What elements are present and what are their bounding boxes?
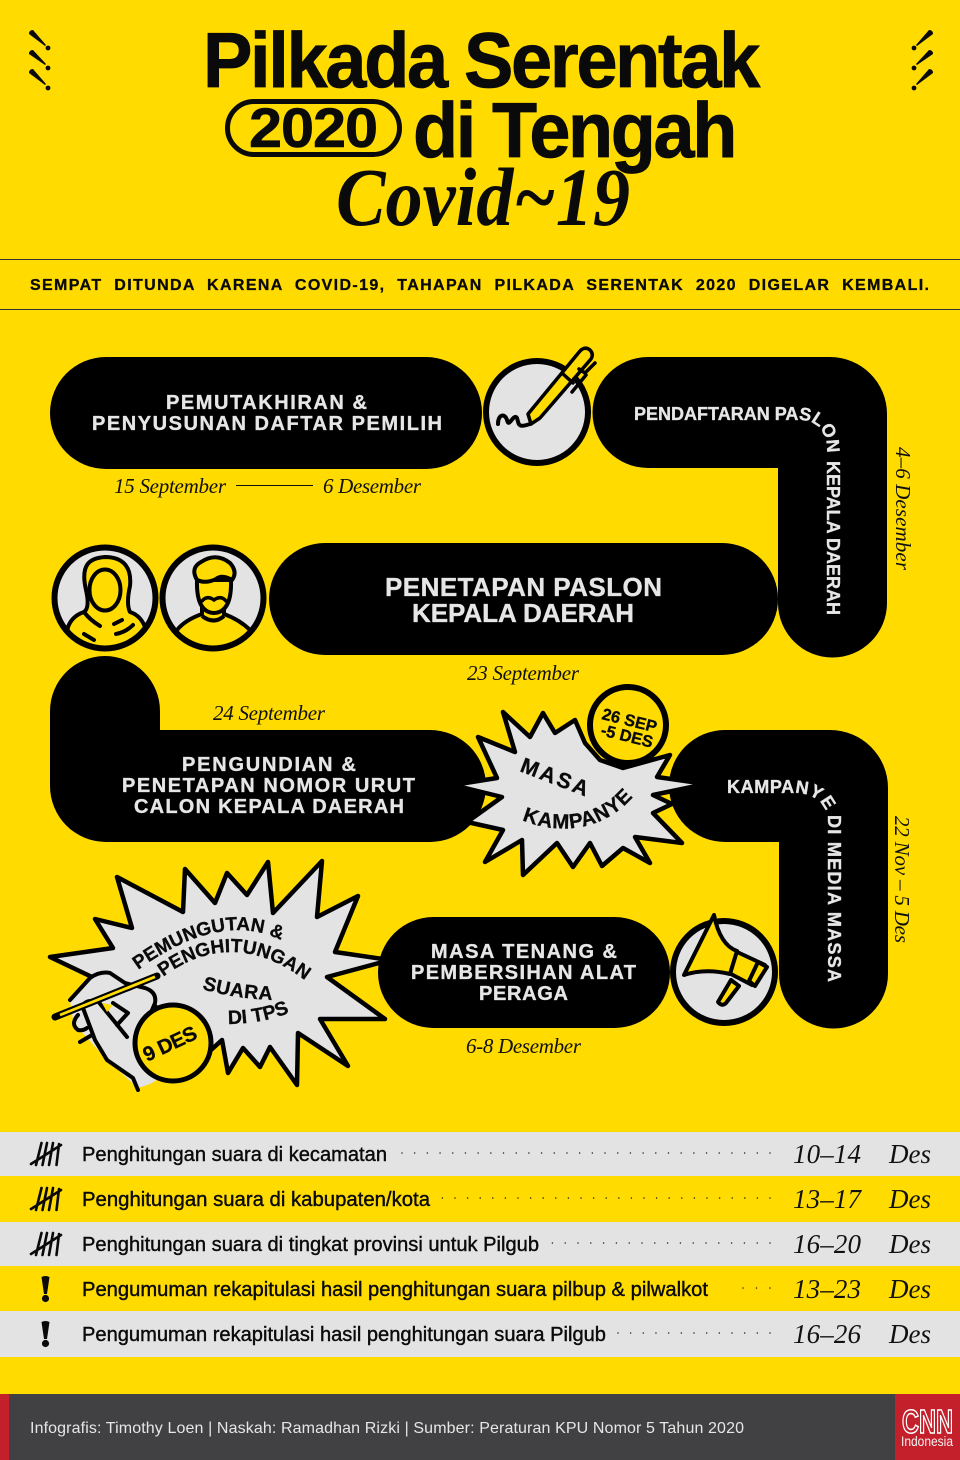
icon: hand with pencil — [55, 973, 200, 1090]
list row: pengumuman pilbup pilwalkot: 13–23 — [793, 1274, 861, 1304]
callout: pemungutan burst: SUARA — [203, 977, 272, 1000]
step: penetapan paslon kepala daerah — [269, 543, 778, 655]
list row: kecamatan: Penghitungan suara di kecamatan — [82, 1144, 387, 1166]
list row: provinsi — [0, 1222, 960, 1266]
list row: pengumuman pilbup pilwalkot: Des — [888, 1274, 931, 1304]
step: masa tenang: MASA TENANG & — [431, 941, 617, 963]
title — [203, 16, 761, 243]
badge: 9 Des — [135, 1005, 211, 1081]
step: pengundian nomor urut: PENGUNDIAN & — [182, 754, 356, 776]
step: kampanye di media massa: KAMPANYE — [728, 780, 836, 810]
step: pengundian nomor urut — [50, 656, 486, 842]
title: 2020 — [249, 96, 377, 159]
list row: pengumuman pilgub: 16–26 — [793, 1319, 862, 1349]
step: masa tenang — [378, 917, 670, 1028]
date: 15 September to 6 Desember: 6 Desember — [323, 474, 422, 498]
callout: pemungutan burst — [48, 858, 388, 1092]
step: pemutakhiran daftar pemilih — [50, 357, 482, 469]
title: Pilkada Serentak — [203, 16, 761, 104]
callout: masa kampanye burst — [464, 684, 694, 878]
list row: provinsi: Des — [888, 1229, 931, 1259]
date: 15 September to 6 Desember — [114, 474, 422, 498]
icon: left exclamation marks — [29, 30, 50, 90]
title: di Tengah — [413, 86, 735, 174]
step: penetapan paslon kepala daerah: KEPALA DAERAH — [412, 598, 634, 628]
badge: 9 Des: 9 DES — [139, 1022, 201, 1067]
callout: pemungutan burst: PEMUNGUTAN & — [132, 916, 282, 970]
step: masa tenang: PERAGA — [479, 983, 568, 1005]
badge: 26 Sep - 5 Des: -5 DES — [599, 721, 655, 752]
date: 23 September: 23 September — [467, 661, 580, 685]
list row: pengumuman pilgub — [0, 1311, 960, 1357]
callout: pemungutan burst: PENGHITUNGAN — [156, 938, 312, 980]
list row: kabupaten/kota: Des — [888, 1184, 931, 1214]
list row: kecamatan — [0, 1132, 960, 1176]
date: 4-6 Desember: 4–6 Desember — [891, 447, 915, 571]
date: 15 September to 6 Desember: 15 September — [114, 474, 227, 498]
callout: masa kampanye burst: KAMPANYE — [523, 788, 633, 829]
footer — [0, 1394, 960, 1460]
list row: kabupaten/kota — [31, 1184, 931, 1214]
step: kampanye di media massa: DI MEDIA MASSA — [824, 815, 844, 982]
footer: Infografis: Timothy Loen | Naskah: Ramadhan Rizki | Sumber: Peraturan KPU Nomor 5 Tahun 2020 — [30, 1420, 744, 1437]
step: pengundian nomor urut: PENETAPAN NOMOR URUT — [122, 775, 415, 797]
icon: megaphone — [673, 915, 775, 1023]
list row: kecamatan: Des — [888, 1139, 931, 1169]
list row: provinsi: Penghitungan suara di tingkat provinsi untuk Pilgub — [82, 1234, 539, 1256]
icon: pen signing — [486, 348, 595, 463]
step: pendaftaran paslon kepala daerah: KEPALA DAERAH — [823, 461, 843, 615]
step: kampanye di media massa — [670, 730, 888, 1028]
date: 24 September: 24 September — [213, 701, 326, 725]
list row: kabupaten/kota: Penghitungan suara di kabupaten/kota — [82, 1189, 431, 1211]
step: pengundian nomor urut: CALON KEPALA DAERAH — [134, 796, 404, 818]
callout: masa kampanye burst: MASA — [517, 753, 592, 801]
list row: pengumuman pilbup pilwalkot — [42, 1274, 931, 1304]
icon: woman with hijab — [54, 548, 156, 660]
icon: right exclamation marks — [912, 30, 933, 90]
step: pendaftaran paslon kepala daerah: PENDAFTARAN PASLON — [635, 406, 840, 452]
badge: 26 Sep - 5 Des: 26 SEP — [600, 705, 659, 736]
list row: pengumuman pilbup pilwalkot: Pengumuman rekapitulasi hasil penghitungan suara pilbup & pilwalkot — [82, 1279, 708, 1301]
date: 6-8 Desember: 6-8 Desember — [466, 1034, 582, 1058]
step: pendaftaran paslon kepala daerah — [592, 357, 887, 658]
list row: kecamatan: 10–14 — [793, 1139, 861, 1169]
step: masa tenang: PEMBERSIHAN ALAT — [411, 962, 636, 984]
list row: pengumuman pilgub: Des — [888, 1319, 931, 1349]
date: 22 Nov - 5 Des: 22 Nov – 5 Des — [890, 816, 914, 943]
subtitle band: SEMPAT DITUNDA KARENA COVID-19, TAHAPAN PILKADA SERENTAK 2020 DIGELAR KEMBALI. — [30, 277, 929, 294]
list row: kabupaten/kota: 13–17 — [793, 1184, 862, 1214]
step: pemutakhiran daftar pemilih: PEMUTAKHIRAN & — [166, 392, 367, 414]
icon: man with moustache — [162, 548, 264, 660]
badge: 26 Sep - 5 Des — [590, 687, 666, 763]
callout: pemungutan burst: DI TPS — [228, 1001, 288, 1024]
logo: CNN Indonesia: Indonesia — [901, 1434, 953, 1449]
step: penetapan paslon kepala daerah: PENETAPAN PASLON — [385, 572, 662, 602]
list row: pengumuman pilgub: Pengumuman rekapitulasi hasil penghitungan suara Pilgub — [82, 1324, 606, 1346]
logo: CNN Indonesia — [895, 1394, 960, 1460]
title: Covid~19 — [336, 151, 630, 243]
step: pemutakhiran daftar pemilih: PENYUSUNAN DAFTAR PEMILIH — [92, 413, 442, 435]
list row: provinsi: 16–20 — [793, 1229, 862, 1259]
